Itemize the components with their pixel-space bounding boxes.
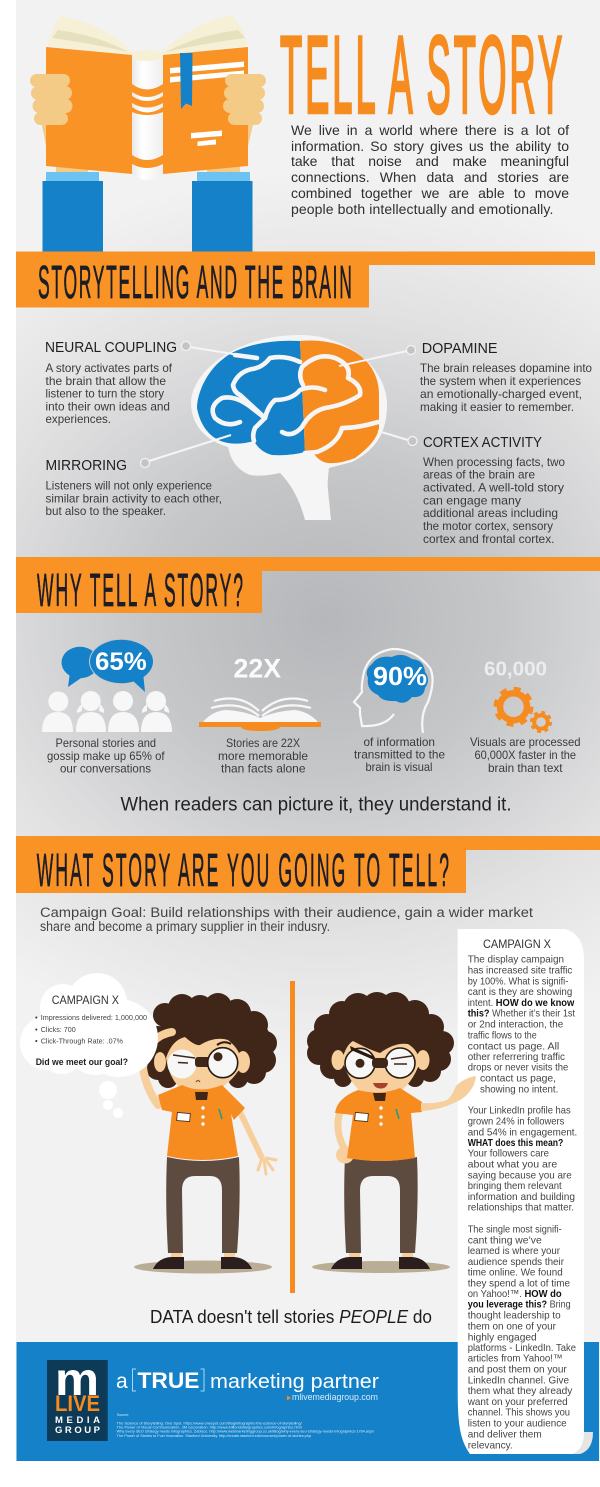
icon: head outline with brain: 90% — [373, 661, 427, 691]
sources: Why every SEO strategy needs infographics. Zabisco. http://www.webmarketinggroup.co.uk/Blog/why-every-seo-strategy-needs-infographics-1764.aspx — [117, 1430, 374, 1434]
text: neural coupling: NEURAL COUPLING — [45, 339, 177, 356]
paragraph: linkedin: bringing them relevant — [468, 1181, 562, 1192]
intro paragraph: combined together we are able to move — [291, 185, 569, 201]
section header: why tell a story — [16, 557, 600, 617]
campaign metrics: • — [35, 1037, 38, 1046]
right sleeve — [192, 166, 252, 252]
connector: neural coupling — [182, 342, 257, 358]
hair — [307, 992, 454, 1087]
left sleeve — [42, 166, 103, 252]
paragraph: linkedin: and 54% in engagement. — [468, 1127, 577, 1138]
paragraph: site traffic: by 100%. What is signifi- — [468, 976, 568, 987]
text: cortex activity: areas of the brain are — [423, 469, 535, 482]
character: confused analyst — [134, 993, 277, 1274]
connector: cortex activity — [378, 431, 417, 446]
intro paragraph: connections. When data and stories are — [291, 169, 569, 185]
intro paragraph: information. So story gives us the ability to — [291, 138, 569, 154]
text: mirroring: MIRRORING — [46, 457, 127, 474]
paragraph: linkedin: relationships that matter. — [468, 1203, 574, 1214]
paragraph: linkedin — [468, 1106, 577, 1214]
paragraph: site traffic: has increased site traffic — [468, 966, 572, 977]
brain diagram — [140, 335, 417, 520]
stat: 65% conversations — [42, 639, 172, 776]
caption: brain is visual — [366, 760, 432, 774]
intro paragraph: take that noise and make meaningful — [291, 153, 569, 169]
text: dopamine: an emotionally-charged event, — [420, 388, 582, 401]
logo: mlive media group: LIVE — [55, 1391, 100, 1416]
section header: storytelling and the brain: STORYTELLING AND THE BRAIN — [38, 258, 352, 309]
text: neural coupling: A story activates parts of — [46, 362, 173, 375]
legs and shoes — [331, 1157, 430, 1269]
divider line between characters — [290, 981, 295, 1293]
panel: campaign x analysis — [458, 929, 593, 1454]
paragraph: site traffic — [468, 955, 575, 1095]
brain folds — [213, 355, 378, 453]
orange hemisphere — [300, 341, 379, 463]
bookmark — [180, 53, 192, 109]
illustration: hands holding open book — [30, 15, 266, 252]
title: TELL A STORY — [280, 14, 562, 137]
stat: 90% visual — [354, 649, 445, 774]
text: dopamine: making it easier to remember. — [420, 401, 574, 414]
text: neural coupling: experiences. — [46, 413, 111, 426]
paragraph: site traffic: other referrering traffic — [468, 1052, 565, 1063]
book covers — [46, 47, 132, 174]
text: mirroring: similar brain activity to each other, — [46, 492, 222, 506]
caption: than facts alone — [221, 762, 306, 776]
paragraph: linkedin: about what you are — [468, 1160, 558, 1170]
blue hemisphere — [197, 341, 305, 455]
paragraph: linkedin: information and building — [468, 1192, 575, 1203]
panel: campaign x analysis: CAMPAIGN X — [483, 939, 551, 951]
campaign goal text — [40, 905, 533, 934]
sources: The Power of Stories to Fuel Innovation. Stanford University. http://create.stanford.edu/courses/power-of-stories.php — [117, 1434, 311, 1438]
paragraph: site traffic: contact us page. All — [468, 1041, 559, 1052]
stat: 60,000 faster — [470, 659, 580, 775]
panel shape — [458, 929, 584, 1454]
campaign metrics: • — [35, 1013, 38, 1022]
paragraph: audience online: they spend a lot of time — [468, 1278, 570, 1289]
caption — [47, 736, 165, 776]
section header: why tell a story: WHY TELL A STORY? — [37, 566, 243, 617]
face — [154, 1037, 250, 1095]
stat: 22X memorable: 22X — [234, 654, 281, 684]
caption: our conversations — [60, 762, 151, 776]
paragraph: site traffic: this? Whether it’s their 1st — [468, 1009, 575, 1020]
paragraph: linkedin: WHAT does this mean? — [468, 1138, 563, 1149]
tagline: a true marketing partner: marketing partner — [210, 1370, 379, 1393]
logo: mlive media group — [47, 1353, 108, 1441]
tagline: a true marketing partner: mlivemediagroup.com — [292, 1392, 378, 1402]
paragraph: site traffic: showing no intent. — [480, 1084, 558, 1095]
thought cloud: campaign x — [20, 973, 158, 1118]
campaign metrics: • — [35, 1025, 38, 1034]
caption — [218, 736, 308, 776]
face — [332, 1041, 430, 1095]
book pages — [48, 15, 247, 62]
paragraph: site traffic: intent. HOW do we know — [468, 998, 575, 1009]
paragraph: site traffic: or 2nd interaction, the — [468, 1020, 564, 1031]
icon: gears — [496, 689, 550, 732]
paragraph: audience online: thought leadership to — [468, 1310, 561, 1321]
text: mirroring — [46, 457, 222, 518]
caption: gossip make up 65% of — [47, 749, 165, 763]
paragraph: audience online: channel. This shows you — [468, 1408, 570, 1419]
paragraph: audience online: on Yahoo!™. HOW do — [468, 1289, 562, 1300]
ground shadow — [312, 1261, 450, 1273]
campaign metrics — [35, 1013, 147, 1046]
connector: mirroring — [140, 435, 231, 468]
paragraph: linkedin: grown 24% in followers — [468, 1116, 564, 1128]
paragraph: site traffic: cant is they are showing — [468, 987, 572, 998]
paragraph: audience online: LinkedIn channel. Give — [468, 1375, 569, 1386]
section header: what story are you going to tell — [16, 836, 600, 897]
left hand — [30, 74, 72, 146]
caption: Personal stories and — [56, 736, 156, 750]
caption — [470, 735, 580, 775]
text: cortex activity: activated. A well-told story — [423, 482, 564, 494]
paragraph: linkedin: Your followers care — [468, 1149, 549, 1160]
paragraph: audience online — [467, 1225, 576, 1451]
page curl — [570, 1432, 593, 1454]
text: cortex activity: CORTEX ACTIVITY — [423, 434, 542, 451]
shirt — [335, 1088, 422, 1161]
hanging arm and hand — [240, 1112, 276, 1174]
paragraph: linkedin: Your LinkedIn profile has — [468, 1106, 571, 1117]
ground shadow — [134, 1260, 272, 1274]
thought cloud: campaign x: Did we meet our goal? — [36, 1057, 128, 1067]
caption: of information — [364, 735, 435, 749]
shirt — [158, 1085, 245, 1160]
tagline: a true marketing partner: a — [116, 1370, 128, 1393]
text: cortex activity: When processing facts, two — [423, 456, 565, 469]
intro paragraph: people both intellectually and emotionally. — [291, 201, 553, 217]
sources: The Power of Visual Communication. 3M corporation. http://www.billiondollargraphics.com/infographics.html — [117, 1426, 302, 1430]
tagline: a true marketing partner: TRUE — [138, 1368, 200, 1393]
paragraph: site traffic: The display campaign — [468, 955, 564, 966]
paragraph: audience online: and deliver them — [468, 1429, 542, 1440]
paragraph: site traffic: drops or never visits the — [468, 1063, 568, 1074]
intro paragraph — [291, 122, 570, 217]
text: cortex activity: can engage many — [423, 494, 521, 507]
caption: Stories are 22X — [226, 736, 300, 750]
caption: transmitted to the — [354, 748, 445, 762]
icon: speech bubbles: 65% — [95, 648, 147, 676]
caption: more memorable — [218, 749, 308, 763]
caption: brain than text — [488, 761, 563, 775]
paragraph: audience online: and post them on your — [468, 1364, 567, 1375]
tagline: when readers can picture it: When readers can picture it, they understand it. — [120, 795, 512, 816]
text: mirroring: but also to the speaker. — [46, 505, 166, 518]
tagline: a true marketing partner — [116, 1368, 379, 1402]
character: explaining analyst — [307, 992, 454, 1273]
paragraph: site traffic: traffic flows to the — [468, 1030, 537, 1041]
paragraph: audience online: learned is where your — [468, 1246, 560, 1257]
paragraph: audience online: audience spends their — [468, 1257, 565, 1268]
footer band — [16, 1342, 599, 1461]
hair — [144, 993, 277, 1088]
paragraph: audience online: time online. We found — [468, 1268, 563, 1279]
paragraph: audience online: platforms - LinkedIn. Take — [468, 1343, 576, 1354]
campaign goal text: Campaign Goal: Build relationships with their audience, gain a wider market — [40, 905, 533, 920]
section header: what story are you going to tell: WHAT STORY ARE YOU GOING TO TELL? — [37, 846, 449, 897]
legs and shoes — [153, 1157, 252, 1269]
glasses — [345, 1046, 415, 1078]
logo: mlive media group: m — [55, 1353, 99, 1405]
campaign metrics: Clicks: 700 — [41, 1025, 76, 1034]
raised arm and hand — [143, 1032, 172, 1105]
text: cortex activity: additional areas including — [423, 507, 558, 520]
book spine — [132, 58, 163, 180]
stat: 60,000 faster: 60,000 — [484, 659, 547, 681]
caption: 60,000X faster in the — [474, 748, 576, 762]
paragraph: audience online: cant thing we’ve — [468, 1235, 542, 1246]
right hand — [223, 74, 266, 146]
paragraph: audience online: listen to your audience — [468, 1419, 567, 1430]
text: neural coupling: listener to turn the story — [46, 388, 164, 400]
brain silhouette — [191, 335, 387, 520]
paragraph: audience online: want on your preferred — [467, 1397, 568, 1408]
paragraph: audience online: The single most signifi- — [468, 1225, 562, 1236]
paragraph: site traffic: contact us page, — [480, 1073, 556, 1084]
section header: storytelling and the brain — [16, 252, 595, 309]
text: neural coupling — [45, 339, 177, 426]
paragraph: audience online: them what they already — [468, 1386, 573, 1397]
campaign metrics: Click-Through Rate: .07% — [41, 1037, 123, 1046]
sources: The Science of Storytelling: One Spot. https://www.onespot.com/blog/infographic-the-science-of-storytelling/ — [117, 1422, 302, 1426]
sources: Source: — [117, 1413, 129, 1417]
icon: open book — [199, 699, 321, 731]
caption: Visuals are processed — [470, 735, 580, 749]
text: cortex activity: cortex and frontal cortex. — [423, 533, 554, 546]
connector: dopamine — [339, 346, 416, 366]
paragraph: linkedin: saying because you are — [468, 1170, 572, 1181]
text: dopamine: DOPAMINE — [422, 340, 498, 357]
campaign metrics: Impressions delivered: 1,000,000 — [41, 1013, 147, 1022]
sources — [117, 1413, 374, 1438]
text: cortex activity — [423, 434, 565, 546]
text: cortex activity: the motor cortex, sensory — [423, 520, 553, 533]
text: neural coupling: the brain that allow the — [46, 375, 166, 388]
logo: mlive media group: MEDIA — [55, 1415, 100, 1426]
text: dopamine: The brain releases dopamine into — [420, 362, 592, 375]
paragraph: audience online: articles from Yahoo!™ — [468, 1353, 563, 1364]
paragraph: audience online: highly engaged — [468, 1332, 537, 1343]
closing line: data doesn't tell stories: DATA doesn't tell stories PEOPLE do — [150, 1307, 432, 1327]
text: dopamine: the system when it experiences — [420, 375, 581, 388]
campaign goal text: share and become a primary supplier in their indusry. — [40, 919, 330, 934]
glasses — [168, 1048, 238, 1082]
logo: mlive media group: GROUP — [55, 1425, 101, 1436]
arm on hip — [336, 1112, 354, 1164]
paragraph: audience online: them on one of your — [468, 1321, 557, 1332]
thought cloud: campaign x: CAMPAIGN X — [52, 995, 119, 1007]
paragraph: audience online: relevancy. — [468, 1440, 513, 1451]
text: mirroring: Listeners will not only experience — [46, 480, 212, 492]
text: dopamine — [420, 340, 592, 414]
icon: four people — [42, 691, 172, 732]
paragraph: audience online: you leverage this? Bring — [468, 1300, 571, 1311]
cover marks — [170, 62, 244, 146]
intro paragraph: We live in a world where there is a lot of — [291, 122, 569, 138]
cloud shape — [20, 973, 158, 1118]
stat: 22X memorable — [199, 654, 321, 776]
caption — [354, 735, 445, 774]
raised arm and hand over panel — [421, 1076, 476, 1111]
text: neural coupling: into their own ideas and — [46, 400, 170, 414]
